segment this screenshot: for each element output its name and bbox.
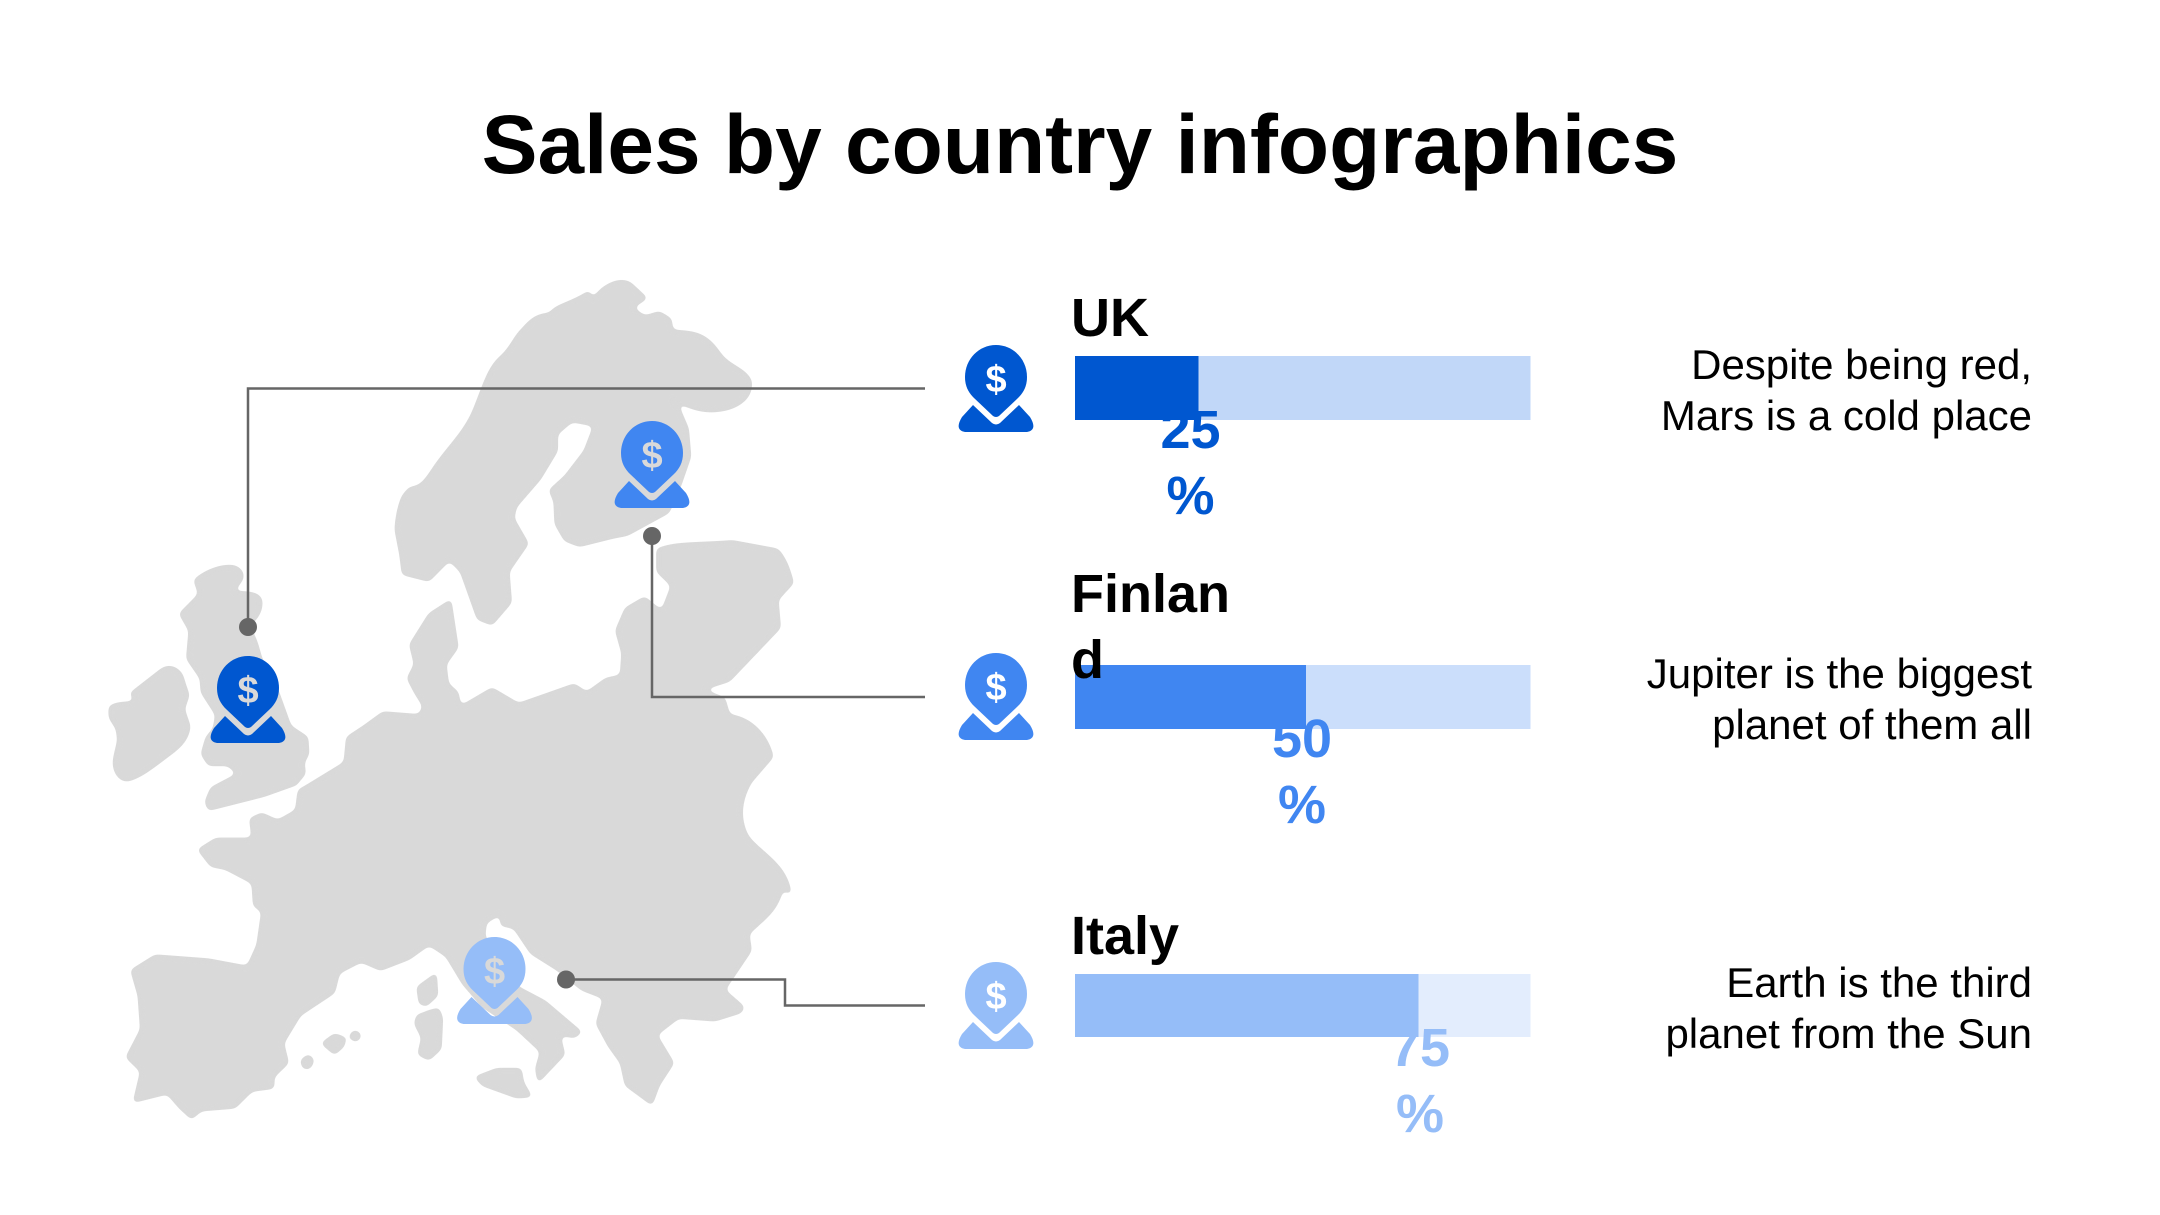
value: Finland 50%: 50 bbox=[1272, 709, 1332, 769]
panel: Finland row bbox=[959, 564, 2032, 835]
icon: Finland row pin: $ bbox=[985, 667, 1007, 709]
icon: Italy map pin bbox=[457, 937, 532, 1024]
panel: UK row bbox=[959, 288, 2032, 526]
bar track: UK bbox=[1075, 356, 1530, 420]
icon: Italy row pin: $ bbox=[985, 976, 1007, 1018]
connector: UK bbox=[239, 388, 925, 636]
bar fill: Italy bbox=[1075, 974, 1418, 1037]
icon: UK row pin: $ bbox=[985, 359, 1007, 401]
description: Italy: planet from the Sun bbox=[1665, 1010, 2032, 1057]
bar fill: Finland bbox=[1075, 665, 1306, 729]
label: Finland: d bbox=[1071, 630, 1104, 690]
bar track: Finland bbox=[1075, 665, 1530, 729]
icon: Finland row pin bbox=[959, 653, 1033, 740]
label: Finland: Finlan bbox=[1071, 564, 1230, 624]
description: Finland: planet of them all bbox=[1712, 701, 2032, 748]
description: Italy: Earth is the third bbox=[1726, 959, 2032, 1006]
connector: Italy bbox=[557, 970, 925, 1006]
value: Finland 50%: % bbox=[1278, 775, 1326, 835]
icon: Italy row pin bbox=[959, 962, 1033, 1049]
map of Europe bbox=[109, 281, 793, 1119]
description: UK: Mars is a cold place bbox=[1661, 392, 2032, 439]
value: UK 25%: % bbox=[1166, 466, 1215, 526]
title: Sales by country infographics bbox=[482, 97, 1678, 191]
icon: Italy map pin: $ bbox=[484, 951, 505, 993]
panel: Italy row bbox=[959, 906, 2032, 1144]
icon: Finland map pin: $ bbox=[641, 435, 663, 477]
description: Finland: Jupiter is the biggest bbox=[1647, 650, 2032, 697]
label: Italy: Italy bbox=[1071, 906, 1179, 966]
icon: UK map pin: $ bbox=[237, 670, 259, 712]
connector: Finland bbox=[643, 527, 925, 697]
value: Italy 75%: 75 bbox=[1390, 1018, 1450, 1078]
value: Italy 75%: % bbox=[1396, 1084, 1444, 1144]
icon: UK map pin bbox=[211, 656, 285, 743]
bar fill: UK bbox=[1075, 356, 1198, 420]
bar track: Italy bbox=[1075, 974, 1530, 1037]
icon: Finland map pin bbox=[615, 421, 689, 508]
value: UK 25%: 25 bbox=[1160, 400, 1221, 460]
label: UK: UK bbox=[1071, 288, 1149, 348]
description: UK: Despite being red, bbox=[1691, 341, 2032, 388]
icon: UK row pin bbox=[959, 345, 1033, 432]
